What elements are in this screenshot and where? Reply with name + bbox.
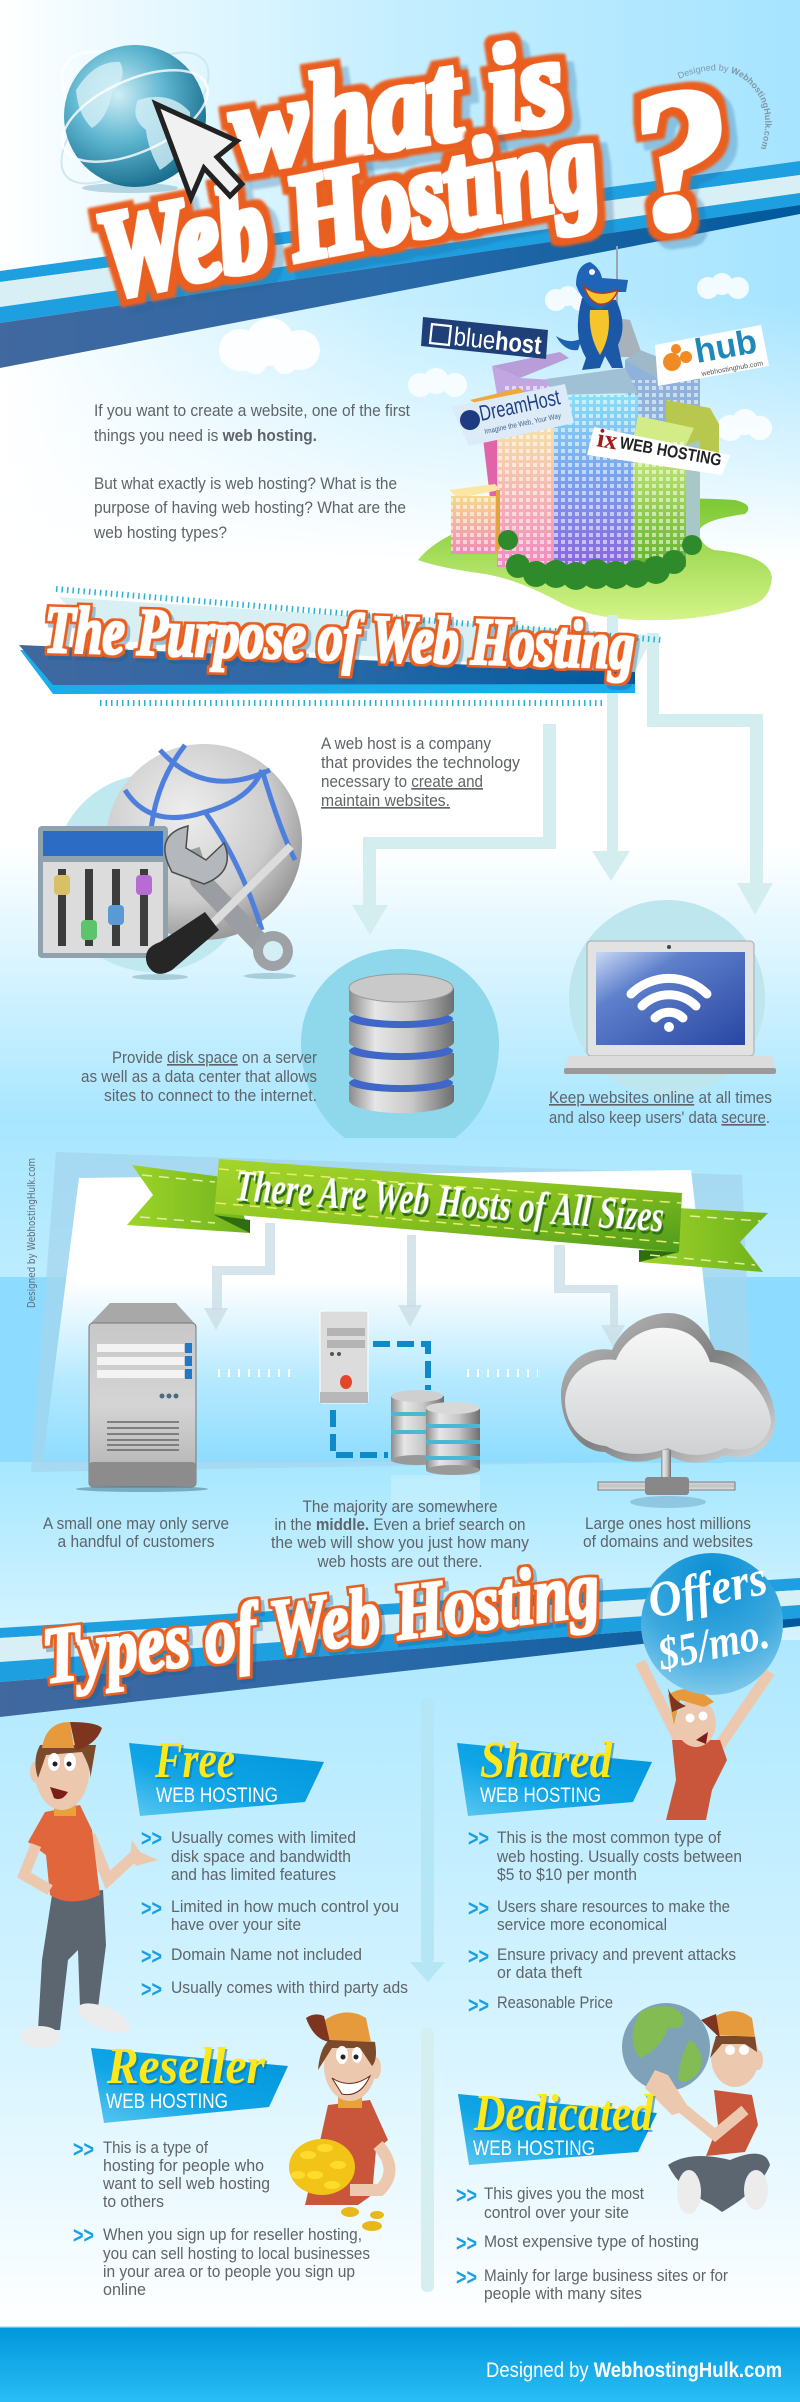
list: reseller hosting: >>: [73, 2222, 94, 2248]
logo: DreamHost: DreamHost: [477, 384, 562, 426]
text: keep websites online: and also keep users' data secure.: [549, 1109, 770, 1127]
icon: laptop with wifi: [564, 900, 776, 1096]
text: middle host: The majority are somewhere: [302, 1498, 498, 1516]
text: middle host: web hosts are out there.: [317, 1553, 482, 1571]
text: middle host: [271, 1498, 530, 1571]
title: what is Web Hosting?: what is: [221, 13, 573, 200]
text: small host: [43, 1515, 229, 1551]
list: dedicated hosting: people with many sites: [484, 2285, 642, 2303]
list: free hosting: Usually comes with third party ads: [171, 1979, 408, 1997]
frame: sizes section: [31, 1152, 755, 1472]
text: disk space: [81, 1049, 317, 1105]
text: middle host: the web will show you just how many: [271, 1534, 530, 1552]
tag: Reseller web hosting: WEB HOSTING: [106, 2090, 228, 2113]
flow arrows: sizes section: [204, 1223, 625, 1347]
tag: Free web hosting: WEB HOSTING: [156, 1784, 278, 1807]
icon: tower and databases: [320, 1311, 480, 1503]
list: shared hosting: >>: [468, 1943, 489, 1969]
text: disk space: sites to connect to the internet.: [104, 1087, 317, 1105]
character: man with coins: [289, 2012, 390, 2231]
logo: hub: hub: [692, 323, 760, 371]
list: dedicated hosting: >>: [456, 2264, 477, 2290]
list: free hosting: Domain Name not included: [171, 1946, 362, 1964]
text: disk space: as well as a data center that allows: [81, 1068, 317, 1086]
tag: Free web hosting: [129, 1732, 324, 1816]
list: shared hosting: or data theft: [497, 1964, 582, 1982]
intro text: [93, 402, 410, 542]
flow arrows: purpose section: [352, 615, 773, 935]
tag: Reseller web hosting: Reseller: [106, 2038, 266, 2095]
dotted connectors: [218, 1369, 538, 1377]
text: small host: A small one may only serve: [43, 1515, 229, 1533]
list: shared hosting: Reasonable Price: [497, 1994, 613, 2012]
badge: Offers $5/mo.: Offers: [643, 1549, 772, 1629]
logo: ix web hosting: [587, 423, 730, 475]
list: dedicated hosting: Most expensive type of hosting: [484, 2233, 699, 2251]
list: free hosting: Usually comes with limited: [171, 1829, 356, 1847]
list: dedicated hosting: control over your site: [484, 2204, 629, 2222]
tag: Dedicated web hosting: WEB HOSTING: [473, 2137, 595, 2160]
list: shared hosting: >>: [468, 1992, 489, 2018]
intro text: web hosting types?: [93, 524, 227, 542]
list: shared hosting: >>: [468, 1895, 489, 1921]
list: reseller hosting: to others: [103, 2193, 164, 2211]
badge: Offers $5/mo.: $5/mo.: [653, 1607, 774, 1680]
heading: Types of Web Hosting: Types of Web Hosting: [37, 1545, 604, 1701]
list: reseller hosting: This is a type of: [103, 2139, 208, 2157]
list: free hosting: >>: [141, 1825, 162, 1851]
list: reseller hosting: When you sign up for reseller hosting,: [103, 2226, 362, 2244]
list: dedicated hosting: >>: [456, 2230, 477, 2256]
icon: cloud server: [561, 1313, 775, 1508]
tag: Dedicated web hosting: [458, 2085, 657, 2165]
list: reseller hosting: want to sell web hosting: [102, 2175, 270, 2193]
side credit: Designed by WebhostingHulk.com: [26, 1158, 38, 1308]
icon: globe with orbits: [40, 27, 230, 206]
list: shared hosting: service more economical: [497, 1916, 667, 1934]
intro text: But what exactly is web hosting? What is the: [94, 475, 397, 493]
list: reseller hosting: online: [103, 2281, 146, 2299]
list: free hosting: >>: [141, 1943, 162, 1969]
divider bar: [421, 2028, 434, 2292]
text: disk space: Provide disk space on a server: [112, 1049, 317, 1067]
curved credit: Designed by WebhostingHulk.com: [678, 64, 772, 150]
heading banner: The Purpose of Web Hosting: [19, 589, 661, 703]
logo: DreamHost: Imagine the Web, Your Way: [484, 411, 562, 436]
footer: Designed by WebhostingHulk.com: [486, 2359, 782, 2382]
intro text: If you want to create a website, one of the first: [94, 402, 410, 420]
text: web host definition: A web host is a company: [321, 735, 492, 753]
logo: bluehost: bluehost: [452, 321, 543, 360]
list: free hosting: have over your site: [171, 1916, 301, 1934]
text: large host: Large ones host millions: [585, 1515, 751, 1533]
tag: Dedicated web hosting: Dedicated: [473, 2085, 654, 2142]
text: keep websites online: [549, 1089, 772, 1127]
icon: small server: [76, 1303, 208, 1492]
text: large host: of domains and websites: [583, 1533, 753, 1551]
illustration: island with hosting towers: [418, 246, 772, 620]
clouds: [219, 273, 772, 441]
tag: Shared web hosting: [457, 1732, 652, 1816]
list: dedicated hosting: This gives you the most: [484, 2185, 644, 2203]
green ribbon heading: [127, 1159, 768, 1272]
list: free hosting: disk space and bandwidth: [171, 1848, 351, 1866]
tag: Shared web hosting: WEB HOSTING: [480, 1784, 601, 1807]
list: shared hosting: web hosting. Usually costs between: [496, 1848, 742, 1866]
diagonal header stripes: [0, 161, 800, 368]
list: shared hosting: $5 to $10 per month: [497, 1866, 637, 1884]
logo: hub: webhostinghub.com: [700, 360, 764, 378]
icon: mouse cursor: [156, 104, 242, 198]
list: dedicated hosting: >>: [456, 2182, 477, 2208]
badge: Offers $5/mo.: [641, 1549, 783, 1695]
center flow arrow: [410, 1698, 445, 1982]
text: large host: [583, 1515, 753, 1551]
list: reseller hosting: in your area or to people you sign up: [103, 2263, 355, 2281]
list: reseller hosting: [73, 2136, 370, 2299]
text: web host definition: necessary to create and: [321, 773, 483, 791]
icon: globe, control panel and tools: [38, 744, 302, 980]
logo: hub: [655, 323, 769, 386]
intro text: purpose of having web hosting? What are the: [94, 499, 406, 517]
list: shared hosting: [468, 1825, 742, 2018]
logo: ix web hosting: ix: [595, 423, 620, 455]
logo: bluehost: [421, 317, 548, 360]
text: web host definition: [321, 735, 521, 810]
list: shared hosting: This is the most common type of: [497, 1829, 721, 1847]
text: keep websites online: Keep websites online at all times: [549, 1089, 772, 1107]
title: what is Web Hosting?: ?: [615, 43, 745, 276]
intro text: things you need is web hosting.: [94, 427, 317, 445]
text: web host definition: that provides the technology: [321, 754, 521, 772]
list: shared hosting: Users share resources to make the: [497, 1898, 730, 1916]
text: web host definition: maintain websites.: [321, 792, 450, 810]
list: shared hosting: >>: [468, 1825, 489, 1851]
list: free hosting: [141, 1825, 408, 2002]
icon: database stack: [301, 949, 499, 1138]
list: reseller hosting: you can sell hosting to local businesses: [103, 2245, 370, 2263]
footer: [0, 2326, 800, 2402]
mascot: gator: [556, 262, 628, 370]
list: dedicated hosting: [456, 2182, 728, 2303]
title: what is Web Hosting?: Web Hosting: [87, 94, 609, 325]
list: free hosting: >>: [141, 1895, 162, 1921]
list: free hosting: >>: [141, 1976, 162, 2002]
character: presenter: [20, 1722, 158, 2048]
list: dedicated hosting: Mainly for large business sites or for: [484, 2267, 728, 2285]
logo: ix web hosting: WEB HOSTING: [618, 433, 723, 470]
list: free hosting: Limited in how much control you: [171, 1898, 399, 1916]
text: small host: a handful of customers: [58, 1533, 214, 1551]
types section stripes: [0, 1578, 800, 1717]
list: reseller hosting: >>: [73, 2136, 94, 2162]
logo: DreamHost: [451, 384, 574, 446]
tag: Free web hosting: Free: [154, 1732, 235, 1789]
list: shared hosting: Ensure privacy and prevent attacks: [497, 1946, 736, 1964]
tag: Reseller web hosting: [91, 2038, 288, 2123]
character: man lifting badge: [640, 1662, 770, 1820]
list: free hosting: and has limited features: [171, 1866, 336, 1884]
tag: Shared web hosting: Shared: [480, 1732, 613, 1789]
list: reseller hosting: hosting for people who: [103, 2157, 264, 2175]
character: man holding the earth: [622, 2003, 770, 2214]
text: middle host: in the middle. Even a brief search on: [274, 1516, 526, 1534]
